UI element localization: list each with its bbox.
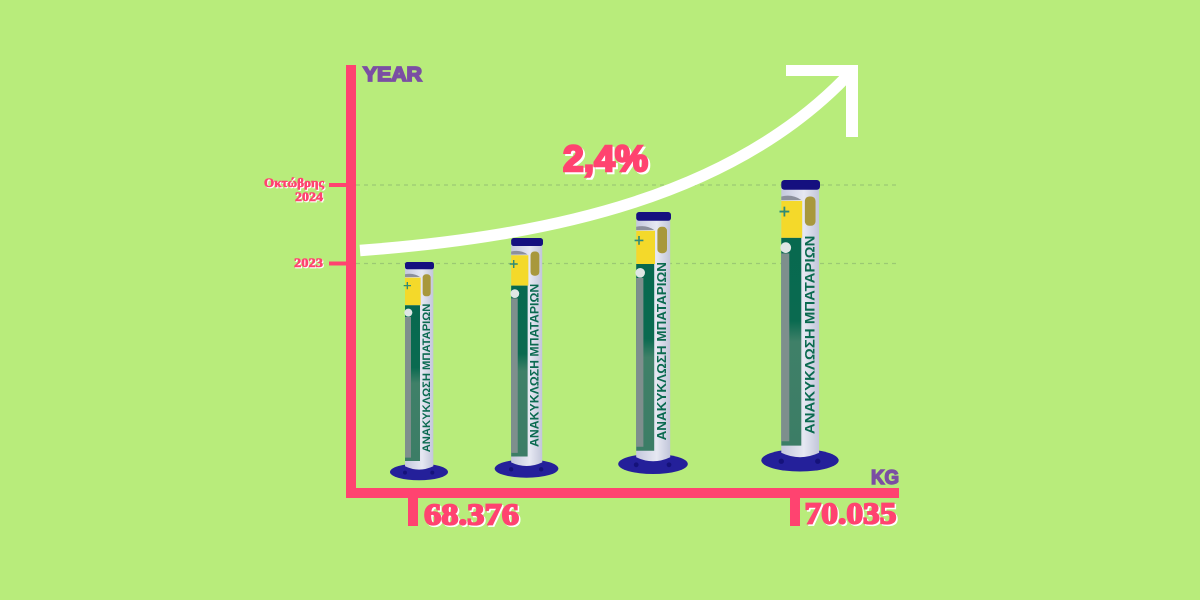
percentage callout: 2,4% — [563, 138, 648, 179]
tick label: 2023: 2023 — [294, 256, 323, 270]
bin 3: ΑΝΑΚΥΚΛΩΣΗ ΜΠΑΤΑΡΙΩΝ — [654, 262, 669, 440]
value: 68.376: 68.376 — [424, 496, 519, 532]
axes — [329, 65, 899, 526]
tick label: October 2024: 2024 — [296, 191, 325, 205]
tick label: October 2024: Οκτώβρης — [265, 177, 326, 191]
growth arrow — [360, 65, 858, 250]
bin 1 — [390, 262, 448, 480]
percentage callout: 2,4% — [565, 140, 650, 181]
bin 3 — [618, 212, 688, 474]
value: 70.035: 70.035 — [804, 496, 896, 530]
bin 1: ΑΝΑΚΥΚΛΩΣΗ ΜΠΑΤΑΡΙΩΝ — [421, 304, 433, 452]
bin 4 — [761, 180, 839, 471]
value: 68.376: 68.376 — [426, 498, 520, 533]
bin 4: ΑΝΑΚΥΚΛΩΣΗ ΜΠΑΤΑΡΙΩΝ — [803, 236, 819, 434]
axis label: year: YEAR — [363, 64, 423, 86]
tick label: October 2024: Οκτώβρης — [264, 176, 325, 190]
bin 2: ΑΝΑΚΥΚΛΩΣΗ ΜΠΑΤΑΡΙΩΝ — [529, 284, 542, 447]
tick label: 2023: 2023 — [295, 257, 324, 271]
tick label: October 2024: 2024 — [295, 190, 324, 204]
tick label: October 2024 — [264, 176, 326, 205]
axis label: kg: KG — [871, 467, 899, 489]
value: 70.035: 70.035 — [806, 497, 898, 532]
bin 2 — [495, 238, 558, 478]
